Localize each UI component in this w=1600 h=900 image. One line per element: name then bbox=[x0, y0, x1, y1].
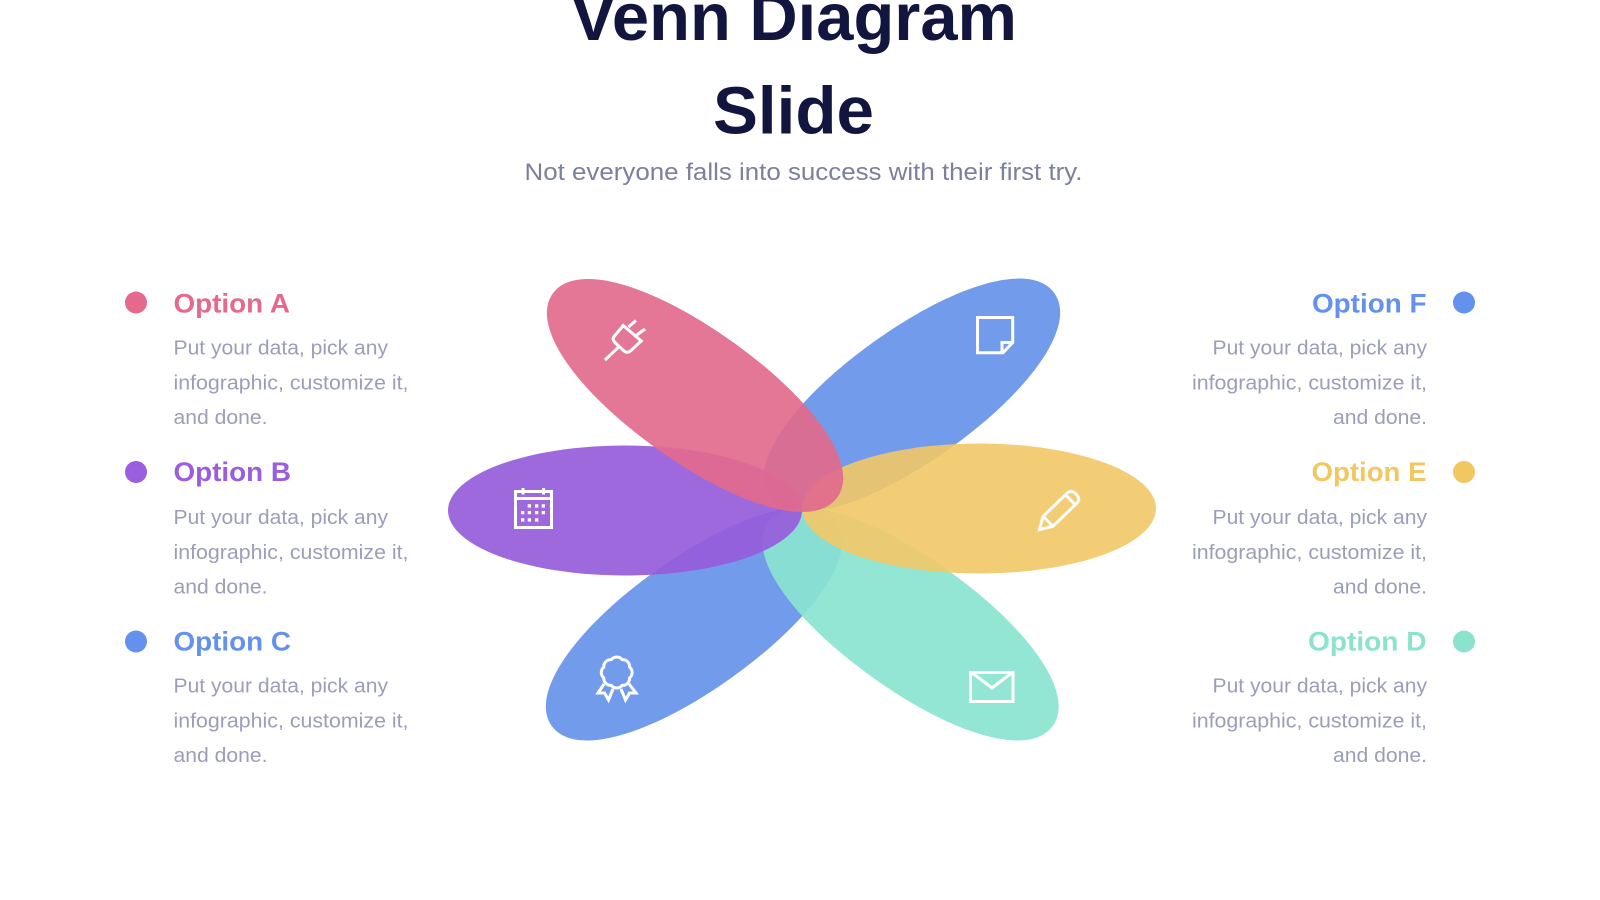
dot: option A bbox=[125, 292, 147, 314]
panel: option C bbox=[125, 626, 408, 767]
text: option A: and done. bbox=[174, 406, 268, 429]
text: option C: Put your data, pick any bbox=[174, 674, 389, 698]
heading: option A: Option A bbox=[174, 288, 290, 318]
text: option A: infographic, customize it, bbox=[174, 372, 408, 394]
text: option F bbox=[1192, 336, 1428, 429]
icon: envelope bbox=[970, 672, 1013, 702]
text: option F: and done. bbox=[1333, 406, 1427, 429]
text: option E: infographic, customize it, bbox=[1192, 541, 1427, 564]
text: option C bbox=[174, 674, 408, 767]
text: option B: and done. bbox=[174, 576, 268, 598]
title bbox=[571, 0, 1017, 148]
text: option B bbox=[174, 506, 408, 598]
text: option D bbox=[1192, 674, 1428, 767]
icon: award ribbon bbox=[598, 657, 636, 700]
petal: option F blue bbox=[732, 240, 1092, 550]
petal: option B purple bbox=[448, 446, 802, 576]
text: option D: infographic, customize it, bbox=[1192, 710, 1427, 732]
text: option A: Put your data, pick any bbox=[174, 336, 389, 360]
dot: option C bbox=[125, 630, 147, 652]
icon: calendar bbox=[515, 488, 552, 528]
text: option E: and done. bbox=[1333, 576, 1427, 598]
dot: option E bbox=[1453, 461, 1475, 483]
text: option E bbox=[1192, 506, 1428, 598]
text: option B: infographic, customize it, bbox=[174, 541, 408, 564]
title: Slide bbox=[713, 74, 874, 148]
petal: option D teal bbox=[730, 469, 1091, 779]
petal: option C blue bbox=[514, 469, 874, 779]
text: option F: Put your data, pick any bbox=[1212, 336, 1428, 360]
heading: option F: Option F bbox=[1312, 288, 1426, 318]
panel: option D bbox=[1192, 626, 1475, 767]
heading: option B: Option B bbox=[174, 457, 291, 487]
heading: option C: Option C bbox=[174, 626, 291, 656]
panel: option B bbox=[125, 457, 408, 598]
panel: option A bbox=[125, 288, 408, 429]
dot: option D bbox=[1453, 630, 1475, 652]
icon: plug bbox=[605, 320, 645, 360]
text: option D: and done. bbox=[1333, 744, 1427, 767]
text: option E: Put your data, pick any bbox=[1212, 506, 1428, 529]
icon: sticky note bbox=[978, 318, 1013, 353]
text: option A bbox=[174, 336, 408, 429]
petal: option E yellow bbox=[802, 444, 1156, 574]
text: option B: Put your data, pick any bbox=[174, 506, 389, 529]
text: option C: and done. bbox=[174, 744, 268, 767]
text: option C: infographic, customize it, bbox=[174, 710, 408, 732]
icon: pencil bbox=[1035, 489, 1081, 535]
text: option D: Put your data, pick any bbox=[1212, 674, 1428, 698]
panel: option F bbox=[1192, 288, 1475, 429]
panel: option E bbox=[1192, 457, 1475, 598]
dot: option B bbox=[125, 461, 147, 483]
dot: option F bbox=[1453, 292, 1475, 314]
heading: option D: Option D bbox=[1308, 626, 1426, 656]
petal: option A pink bbox=[515, 240, 875, 551]
heading: option E: Option E bbox=[1312, 457, 1426, 487]
venn diagram bbox=[448, 240, 1156, 779]
subtitle: Not everyone falls into success with their first try. bbox=[524, 159, 1082, 186]
text: option F: infographic, customize it, bbox=[1192, 372, 1427, 394]
